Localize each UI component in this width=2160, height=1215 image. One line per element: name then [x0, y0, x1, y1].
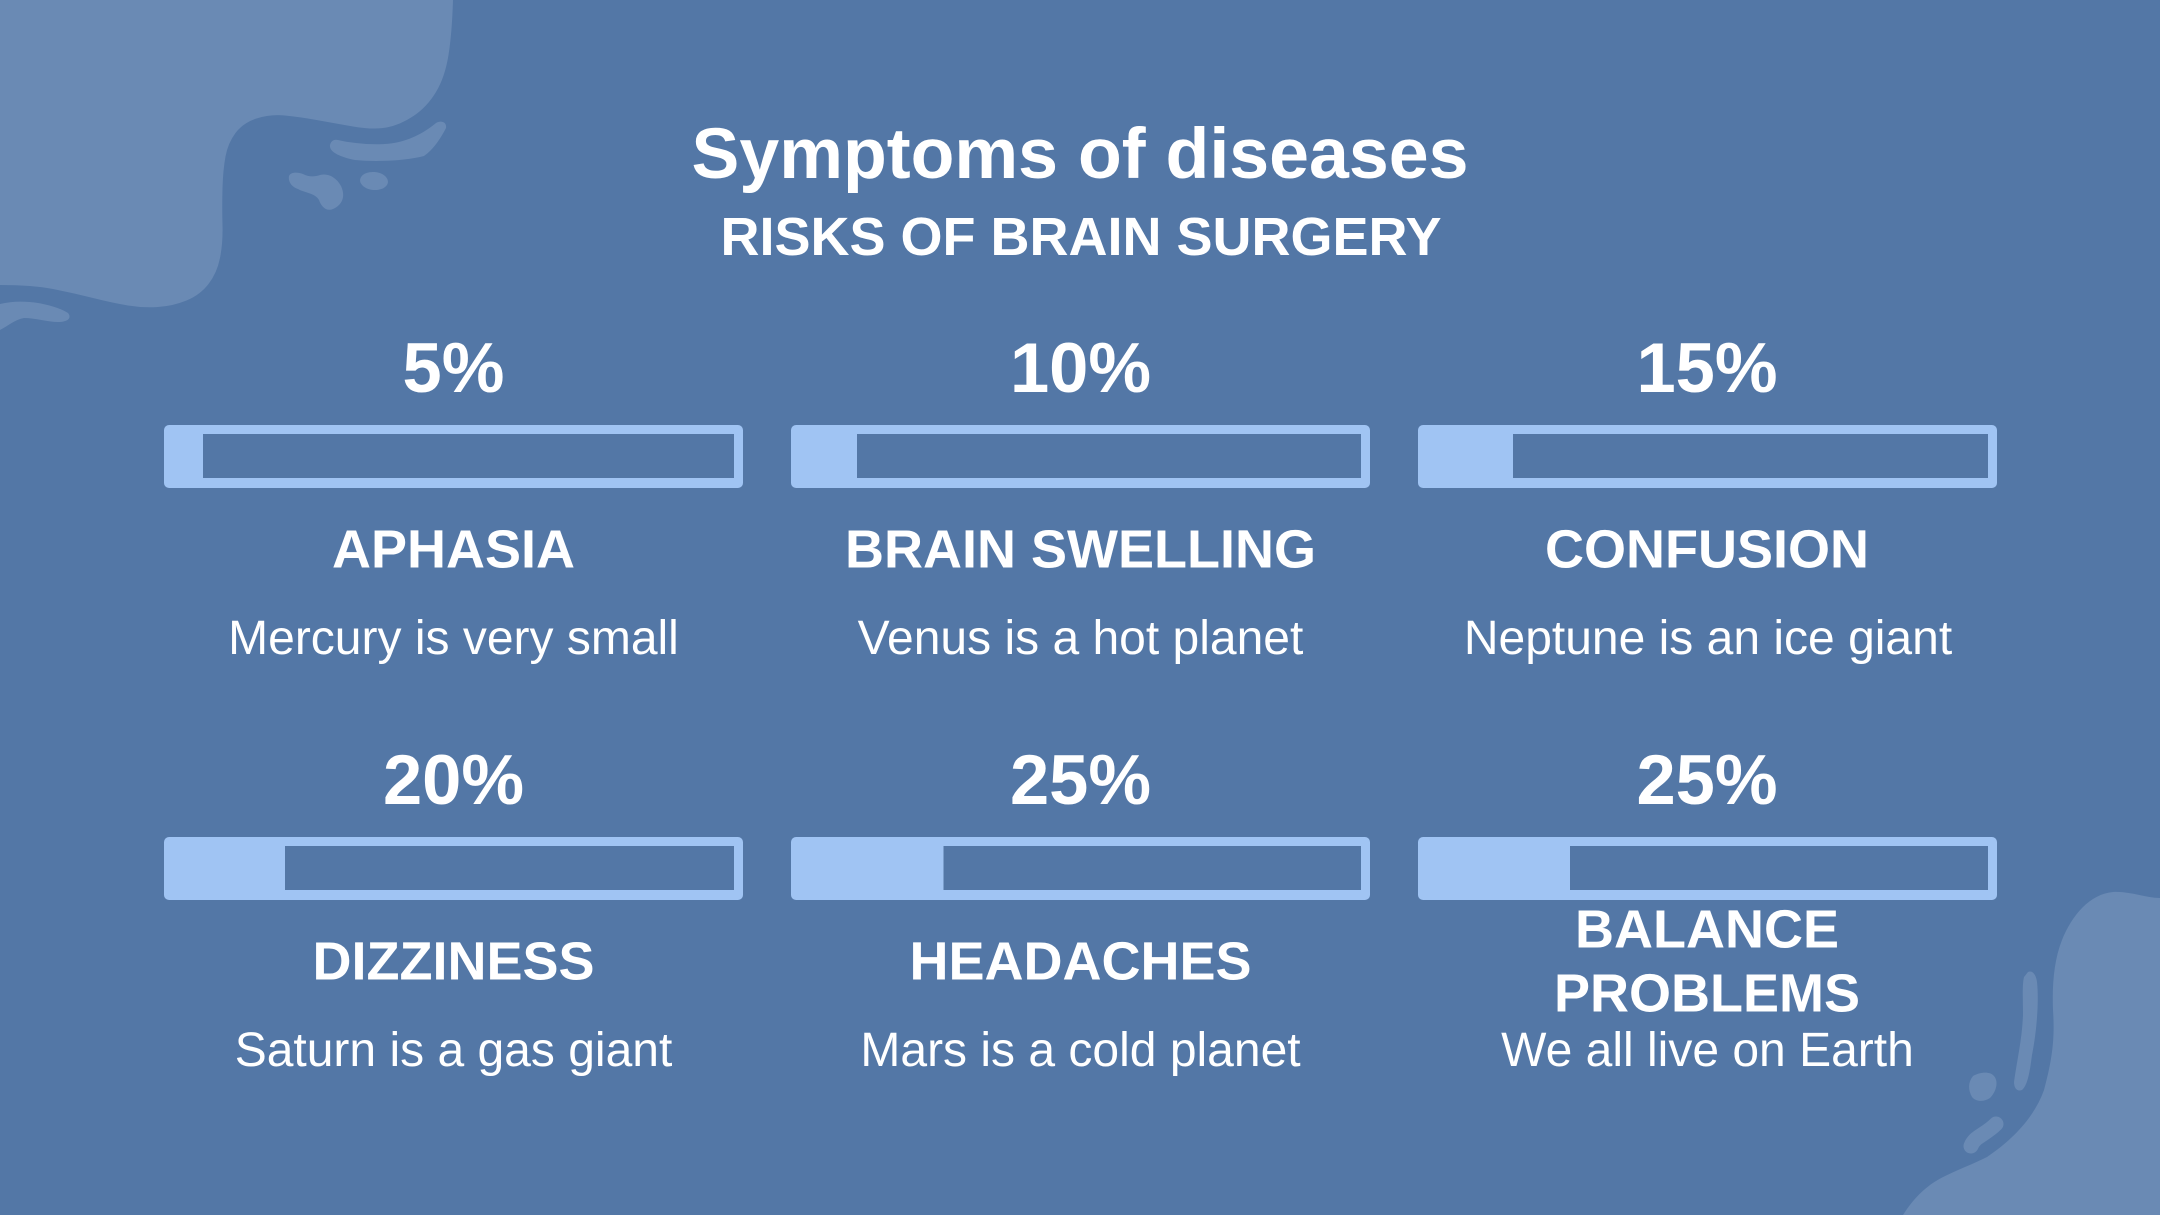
subtitle: RISKS OF BRAIN SURGERY: [720, 207, 1442, 267]
description: aphasia: Mercury is very small: [228, 612, 679, 665]
label: aphasia: APHASIA: [332, 520, 575, 580]
description: confusion: Neptune is an ice giant: [1464, 612, 1952, 665]
decorative blob: bottom right: [1903, 892, 2160, 1215]
panel: dizziness: [164, 740, 743, 1077]
label: balance problems: [1554, 900, 1860, 1024]
percentage: aphasia: 5%: [403, 328, 504, 407]
label: balance problems: PROBLEMS: [1554, 964, 1860, 1024]
description: balance problems: We all live on Earth: [1501, 1024, 1914, 1077]
panel: balance problems: [1418, 740, 1997, 1077]
description: dizziness: Saturn is a gas giant: [235, 1024, 672, 1077]
label: dizziness: DIZZINESS: [312, 932, 595, 992]
percentage: confusion: 15%: [1636, 328, 1778, 407]
percentage: balance problems: 25%: [1636, 740, 1778, 819]
label: brain swelling: BRAIN SWELLING: [845, 520, 1316, 580]
panel: brain swelling: [791, 328, 1370, 665]
label: headaches: HEADACHES: [909, 932, 1252, 992]
percentage: dizziness: 20%: [383, 740, 524, 819]
title: Symptoms of diseases: [692, 114, 1468, 194]
description: brain swelling: Venus is a hot planet: [858, 612, 1303, 665]
label: balance problems: BALANCE: [1575, 900, 1839, 960]
progress bar: 20%: [164, 837, 743, 900]
progress bar: 25%: [791, 837, 1370, 900]
progress bar: 25%: [1418, 837, 1997, 900]
description: headaches: Mars is a cold planet: [860, 1024, 1301, 1077]
label: confusion: CONFUSION: [1545, 520, 1869, 580]
panel: aphasia: [164, 328, 743, 665]
progress bar: 15%: [1418, 425, 1997, 488]
percentage: headaches: 25%: [1010, 740, 1151, 819]
panel: confusion: [1418, 328, 1997, 665]
progress bar: 10%: [791, 425, 1370, 488]
percentage: brain swelling: 10%: [1010, 328, 1151, 407]
progress bar: 5%: [164, 425, 743, 488]
decorative blob: top left: [0, 0, 453, 330]
panel: headaches: [791, 740, 1370, 1077]
